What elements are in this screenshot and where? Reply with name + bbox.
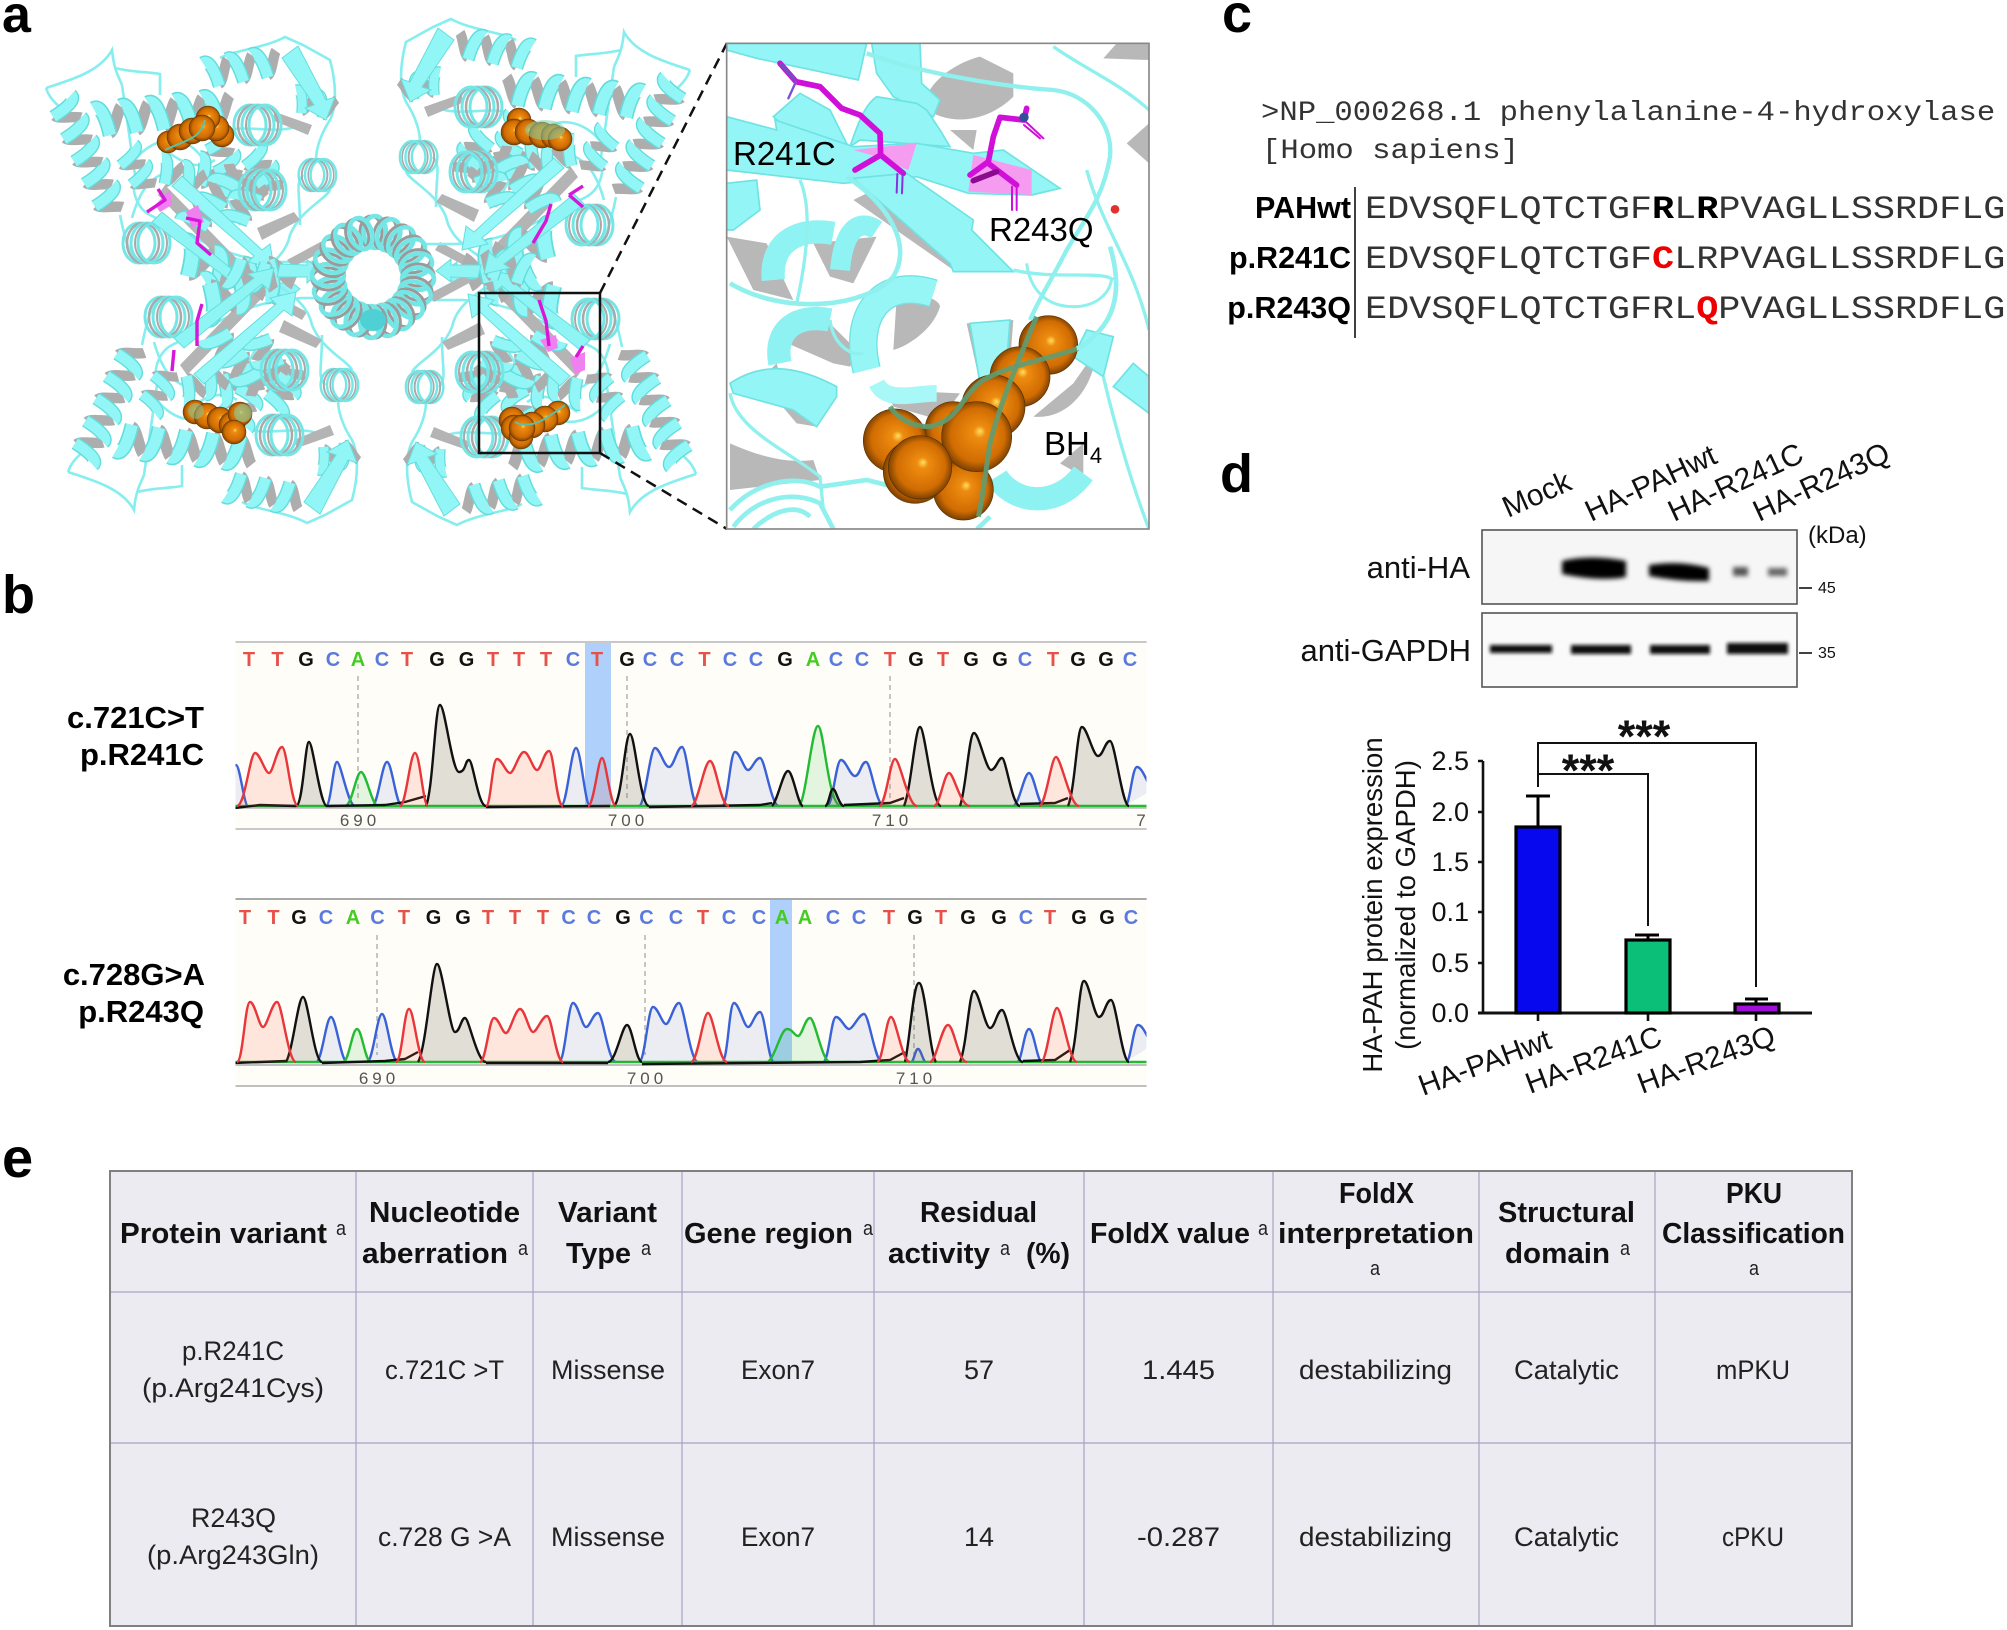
variant label c.721C>T p.R241C: c.721C>T <box>67 700 204 735</box>
position numbers 1: 7 <box>1136 811 1150 830</box>
base calls 1: G <box>429 649 445 671</box>
base calls 1: C <box>1123 649 1137 671</box>
y axis title: (normalized to GAPDH) <box>1390 760 1421 1050</box>
sequences <box>1365 192 2005 328</box>
row p.R241C: destabilizing <box>1299 1355 1452 1385</box>
base calls 2: C <box>1124 907 1138 929</box>
sequences: EDVSQFLQTCTGFRLRPVAGLLSSRDFLG <box>1365 192 2005 228</box>
western blot lane labels: HA-R243Q <box>1748 436 1895 528</box>
panel label b: b <box>2 565 35 625</box>
panel a: PAH tetramer protein structure <box>46 19 696 525</box>
base calls 1: C <box>723 649 737 671</box>
base calls 2: C <box>669 907 683 929</box>
base calls 1: T <box>487 649 499 671</box>
table header: domain <box>1505 1238 1610 1270</box>
base calls 1: C <box>670 649 684 671</box>
tick labels: 2.0 <box>1431 797 1469 827</box>
position numbers 1: 700 <box>608 811 648 830</box>
western blot lane labels <box>1497 436 1895 528</box>
base calls 2: T <box>697 907 709 929</box>
variant label c.728G>A p.R243Q: p.R243Q <box>78 994 204 1029</box>
base calls 2: C <box>752 907 766 929</box>
monomer lower left <box>68 240 359 523</box>
blot labels <box>1300 550 1471 668</box>
row R243Q: c.728 G >A <box>378 1522 511 1552</box>
header footnote markers: a <box>336 1218 347 1240</box>
y axis title: HA-PAH protein expression <box>1357 737 1388 1073</box>
panel label e: e <box>2 1126 33 1189</box>
base calls 1: T <box>591 649 603 671</box>
position numbers 2: 700 <box>627 1069 667 1088</box>
position numbers 2: 710 <box>896 1069 936 1088</box>
table header: Structural <box>1498 1197 1635 1229</box>
position numbers 1: 710 <box>872 811 912 830</box>
row R243Q: destabilizing <box>1299 1522 1452 1552</box>
base calls 1: C <box>566 649 580 671</box>
base calls 1: G <box>777 649 793 671</box>
row p.R241C: 57 <box>964 1355 994 1385</box>
header footnote markers <box>336 1218 1760 1280</box>
kDa markers: (kDa) <box>1808 522 1867 549</box>
error bars <box>1526 796 1768 1004</box>
sequence header: >NP_000268.1 phenylalanine-4-hydroxylase <box>1261 97 1995 129</box>
sequences: EDVSQFLQTCTGFRLQPVAGLLSSRDFLG <box>1365 292 2005 328</box>
western blot anti-HA <box>1482 530 1797 604</box>
tick labels: 1.5 <box>1431 847 1469 877</box>
base calls 2: C <box>852 907 866 929</box>
base calls 1: T <box>513 649 525 671</box>
base calls 2: G <box>991 907 1007 929</box>
base calls 2: C <box>370 907 385 929</box>
base calls 1: C <box>829 649 843 671</box>
table header: Residual <box>920 1197 1037 1229</box>
base calls 2: T <box>883 907 895 929</box>
table header: aberration <box>362 1238 508 1270</box>
base calls 1: G <box>963 649 979 671</box>
x labels: HA-R243Q <box>1633 1019 1780 1101</box>
dashed zoom connector top <box>600 43 727 293</box>
base calls 1: A <box>806 649 820 671</box>
base calls 1: T <box>243 649 255 671</box>
table header <box>120 1178 1845 1270</box>
BH4 spheres lower left <box>183 400 252 444</box>
tick labels: 0.0 <box>1431 998 1469 1028</box>
row p.R241C: (p.Arg241Cys) <box>142 1373 324 1403</box>
base calls 2: C <box>319 907 333 929</box>
header footnote markers: a <box>1000 1238 1011 1260</box>
row R243Q: cPKU <box>1722 1522 1784 1552</box>
table header: Nucleotide <box>369 1197 520 1229</box>
dashed zoom connector bottom <box>600 453 727 529</box>
base calls 2: C <box>1019 907 1033 929</box>
table header: PKU <box>1726 1178 1782 1210</box>
base calls 1: G <box>298 649 314 671</box>
blot labels: anti-HA <box>1367 550 1470 585</box>
significance brackets <box>1538 743 1756 987</box>
position numbers 1 <box>340 811 1150 830</box>
base calls 1: T <box>698 649 711 671</box>
base calls 1 <box>243 649 1137 671</box>
base calls 1: C <box>1018 649 1032 671</box>
header footnote markers: a <box>1620 1238 1631 1260</box>
tick labels: 0.1 <box>1431 897 1469 927</box>
significance stars: *** <box>1618 711 1671 762</box>
base calls 2: T <box>935 907 947 929</box>
base calls 1: T <box>1047 649 1059 671</box>
western blot lane labels: HA-PAHwt <box>1580 439 1722 528</box>
tick labels: 0.5 <box>1431 948 1469 978</box>
row p.R241C: mPKU <box>1716 1355 1790 1385</box>
row R243Q <box>147 1503 1784 1570</box>
axes <box>1478 761 1812 1021</box>
position numbers 2: 690 <box>359 1069 399 1088</box>
base calls 1: C <box>375 649 389 671</box>
variants table <box>110 1171 1852 1626</box>
panel a inset: close-up of R241C, R243Q, BH4 <box>727 43 1149 529</box>
row p.R241C <box>142 1336 1790 1403</box>
row R243Q: (p.Arg243Gln) <box>147 1540 319 1570</box>
base calls 2: T <box>509 907 521 929</box>
base calls 1: C <box>749 649 763 671</box>
base calls 2: C <box>587 907 601 929</box>
header footnote markers: a <box>518 1238 529 1260</box>
row R243Q: R243Q <box>191 1503 276 1533</box>
monomer lower right <box>405 242 696 525</box>
base calls 2: G <box>907 907 923 929</box>
base calls 1: G <box>619 649 635 671</box>
base calls 2 <box>239 907 1138 929</box>
bar chart HA-PAH protein expression <box>1357 711 1812 1103</box>
label R243Q: R243Q <box>989 211 1094 248</box>
sequence alignment <box>1227 187 2005 338</box>
row p.R241C: Exon7 <box>741 1355 815 1385</box>
base calls 1: T <box>884 649 896 671</box>
kDa markers: 45 <box>1818 580 1836 597</box>
panel label d: d <box>1220 444 1253 504</box>
base calls 1: T <box>937 649 949 671</box>
base calls 2: G <box>291 907 307 929</box>
base calls 2: T <box>239 907 251 929</box>
header footnote markers: a <box>1370 1258 1381 1280</box>
label R241C: R241C <box>733 135 836 172</box>
base calls 2: A <box>775 907 789 929</box>
BH4 orange spheres <box>863 316 1078 520</box>
base calls 1: A <box>351 649 365 671</box>
kDa markers: 35 <box>1818 645 1836 662</box>
table header: Classification <box>1662 1218 1845 1250</box>
base calls 2: C <box>722 907 736 929</box>
base calls 2: A <box>346 907 360 929</box>
row R243Q: Missense <box>551 1522 665 1552</box>
header footnote markers: a <box>1749 1258 1760 1280</box>
BH4 spheres lower right <box>499 401 570 449</box>
base calls 2: T <box>267 907 280 929</box>
base calls 1: T <box>271 649 284 671</box>
base calls 2: G <box>1071 907 1087 929</box>
row labels: p.R243Q <box>1227 291 1351 325</box>
BH4 spheres upper left <box>157 106 234 153</box>
row p.R241C: p.R241C <box>182 1336 284 1366</box>
base calls 2: G <box>615 907 631 929</box>
base calls 1: C <box>643 649 657 671</box>
chromatogram 2 <box>235 898 1152 1088</box>
row p.R241C: Missense <box>551 1355 665 1385</box>
table header: activity <box>888 1238 990 1270</box>
header footnote markers: a <box>641 1238 652 1260</box>
base calls 1: G <box>992 649 1008 671</box>
row labels: p.R241C <box>1229 241 1351 275</box>
position numbers 2 <box>359 1069 936 1088</box>
row p.R241C: Catalytic <box>1514 1355 1619 1385</box>
table header: (%) <box>1026 1238 1070 1270</box>
significance stars <box>1562 711 1671 796</box>
base calls 1: T <box>401 649 413 671</box>
row R243Q: -0.287 <box>1137 1522 1220 1552</box>
base calls 1: G <box>459 649 474 671</box>
BH4 spheres upper right <box>501 108 572 151</box>
variant label c.721C>T p.R241C: p.R241C <box>80 737 204 772</box>
base calls 1: G <box>908 649 924 671</box>
row R243Q: 14 <box>964 1522 994 1552</box>
table header: interpretation <box>1278 1218 1474 1250</box>
residue sticks <box>780 63 1043 210</box>
header footnote markers: a <box>1258 1218 1269 1240</box>
base calls 2: T <box>398 907 410 929</box>
position numbers 1: 690 <box>340 811 380 830</box>
bars <box>1516 827 1779 1013</box>
x labels: HA-R241C <box>1521 1020 1666 1101</box>
tick labels: 2.5 <box>1431 746 1469 776</box>
base calls 2: G <box>455 907 471 929</box>
row labels <box>1227 191 1351 325</box>
table header: Gene region <box>684 1218 853 1250</box>
table header: Protein variant <box>120 1218 327 1250</box>
monomer upper left <box>46 37 337 320</box>
base calls 1: C <box>326 649 340 671</box>
row p.R241C: c.721C >T <box>385 1355 504 1385</box>
base calls 2: T <box>1044 907 1056 929</box>
base calls 1: T <box>540 649 552 671</box>
base calls 2: G <box>426 907 441 929</box>
table header: Type <box>566 1238 631 1270</box>
base calls 2: G <box>960 907 976 929</box>
monomer upper right <box>399 19 690 302</box>
western blot anti-GAPDH <box>1482 613 1797 687</box>
base calls 1: G <box>1070 649 1086 671</box>
variant label c.728G>A p.R243Q: c.728G>A <box>63 957 205 992</box>
label BH4: BH <box>1044 425 1090 462</box>
table header: Variant <box>558 1197 657 1229</box>
western blot lane labels: Mock <box>1497 465 1577 524</box>
base calls 2: A <box>798 907 812 929</box>
base calls 1: G <box>1098 649 1114 671</box>
x labels <box>1414 1019 1780 1103</box>
base calls 2: T <box>537 907 549 929</box>
mutated residue sticks <box>147 186 585 374</box>
row R243Q: Catalytic <box>1514 1522 1619 1552</box>
table header: FoldX value <box>1090 1218 1250 1250</box>
base calls 2: C <box>561 907 576 929</box>
kDa markers <box>1799 522 1867 662</box>
row R243Q: Exon7 <box>741 1522 815 1552</box>
chromatogram 1 <box>226 641 1152 830</box>
western blot lane labels: HA-R241C <box>1663 437 1808 528</box>
x labels: HA-PAHwt <box>1414 1023 1556 1103</box>
row labels: PAHwt <box>1255 191 1351 225</box>
base calls 1: C <box>855 649 869 671</box>
sequence header <box>1261 97 1995 167</box>
sequence header: [Homo sapiens] <box>1262 135 1519 167</box>
sequences: EDVSQFLQTCTGFCLRPVAGLLSSRDFLG <box>1365 242 2005 278</box>
base calls 2: C <box>639 907 654 929</box>
blot labels: anti-GAPDH <box>1300 633 1471 668</box>
significance stars: *** <box>1562 745 1615 796</box>
base calls 2: C <box>826 907 840 929</box>
header footnote markers: a <box>863 1218 874 1240</box>
row p.R241C: 1.445 <box>1142 1355 1215 1385</box>
y axis title <box>1357 737 1421 1073</box>
tick labels <box>1431 746 1469 1028</box>
zoom box on tetramer <box>479 293 600 453</box>
label BH4: 4 <box>1090 443 1102 468</box>
base calls 2: T <box>482 907 494 929</box>
base calls 2: G <box>1099 907 1115 929</box>
central helical ring <box>311 215 435 339</box>
table header: FoldX <box>1339 1178 1415 1210</box>
